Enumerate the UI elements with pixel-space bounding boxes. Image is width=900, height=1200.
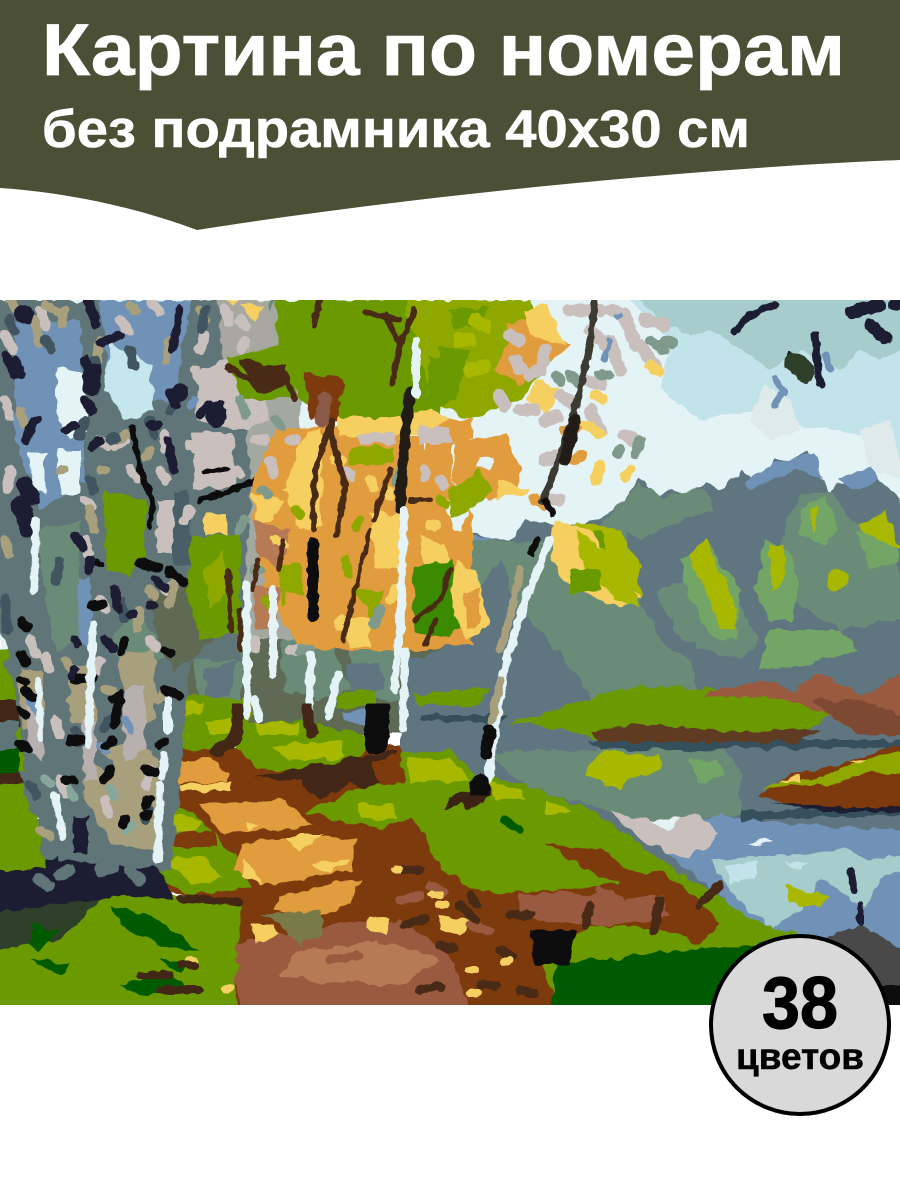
mottled foliage dabs	[235, 310, 673, 650]
painting: birch forest by the river	[0, 290, 900, 1015]
far bank with brown shore	[412, 670, 900, 742]
subtitle: без подрамника 40х30 см	[42, 100, 750, 159]
river	[400, 700, 900, 960]
branches in the top right corner	[735, 300, 900, 405]
badge: number of colours	[711, 936, 889, 1114]
golden and green foliage	[188, 300, 640, 650]
ground dabs and earth detail	[140, 820, 720, 1000]
small island	[758, 745, 900, 812]
label цветов: цветов	[736, 1036, 864, 1077]
leaning birch dark trunk	[486, 302, 595, 754]
backdrop behind trunks and foliage	[225, 300, 472, 650]
distant forest	[438, 450, 900, 702]
forest path and moss	[158, 694, 564, 1005]
dark bark marks and branches	[5, 300, 277, 824]
number 38: 38	[762, 963, 838, 1044]
white birch stems	[34, 340, 550, 860]
title: Картина по номерам	[42, 10, 845, 91]
underbrush behind the tree trunks	[187, 638, 442, 735]
tree bases at the path	[216, 708, 480, 791]
brown branches in the centre	[228, 300, 450, 650]
header banner	[0, 0, 900, 230]
mottled bark dabs	[5, 300, 270, 886]
sky	[0, 300, 900, 650]
left ground: moss and navy tree base	[0, 650, 240, 1015]
near bank: moss and earth	[410, 776, 830, 1005]
bottom right shore	[820, 870, 900, 1010]
big birch trunks on the left	[0, 300, 275, 870]
